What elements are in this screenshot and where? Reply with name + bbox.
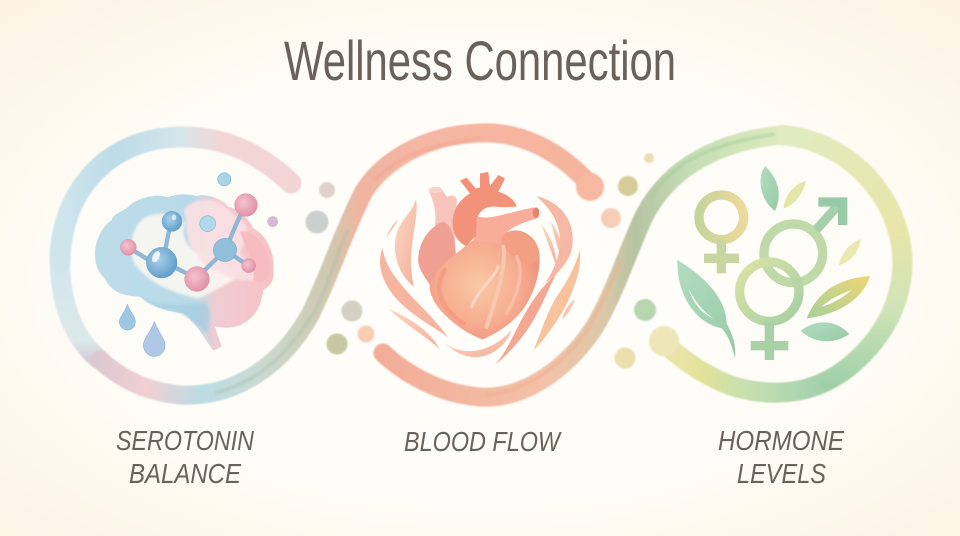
label: serotonin balance: SEROTONIN [116, 425, 255, 456]
brain [95, 194, 274, 351]
highlights [150, 250, 162, 264]
aorta [453, 172, 517, 246]
icon: hormone symbols and leaves [677, 166, 870, 360]
top female symbol [699, 195, 744, 273]
label: serotonin balance: BALANCE [129, 458, 241, 489]
blood flow arc end [576, 173, 604, 201]
icon: brain with molecule [95, 173, 278, 356]
leaves [677, 260, 735, 358]
heart body [430, 231, 540, 339]
water drops [119, 304, 135, 330]
title: Wellness Connection [284, 29, 676, 92]
label: hormone levels [718, 425, 844, 489]
icon: dots [306, 153, 656, 368]
ring end blob [649, 326, 679, 356]
male symbol [764, 202, 843, 283]
panel: serotonin ring [60, 137, 291, 360]
pulmonary tube [473, 207, 539, 243]
label: serotonin balance [116, 425, 255, 489]
flow swirls [380, 196, 580, 365]
connector: serotonin to blood flow [100, 133, 592, 395]
label: hormone levels: LEVELS [737, 458, 826, 489]
panel: blood flow lower arc [383, 134, 780, 397]
icon: heart with flow swirls [380, 172, 580, 365]
panel: hormone ring [663, 135, 902, 393]
chamber [502, 230, 539, 264]
lower female symbol [740, 262, 799, 360]
label: hormone levels: HORMONE [718, 425, 844, 456]
label: blood flow: BLOOD FLOW [404, 426, 562, 457]
brain pale lobes [131, 214, 235, 298]
heart folds [439, 247, 520, 327]
molecule atoms [146, 173, 237, 278]
vessels [428, 187, 457, 243]
molecule bonds [128, 205, 248, 278]
